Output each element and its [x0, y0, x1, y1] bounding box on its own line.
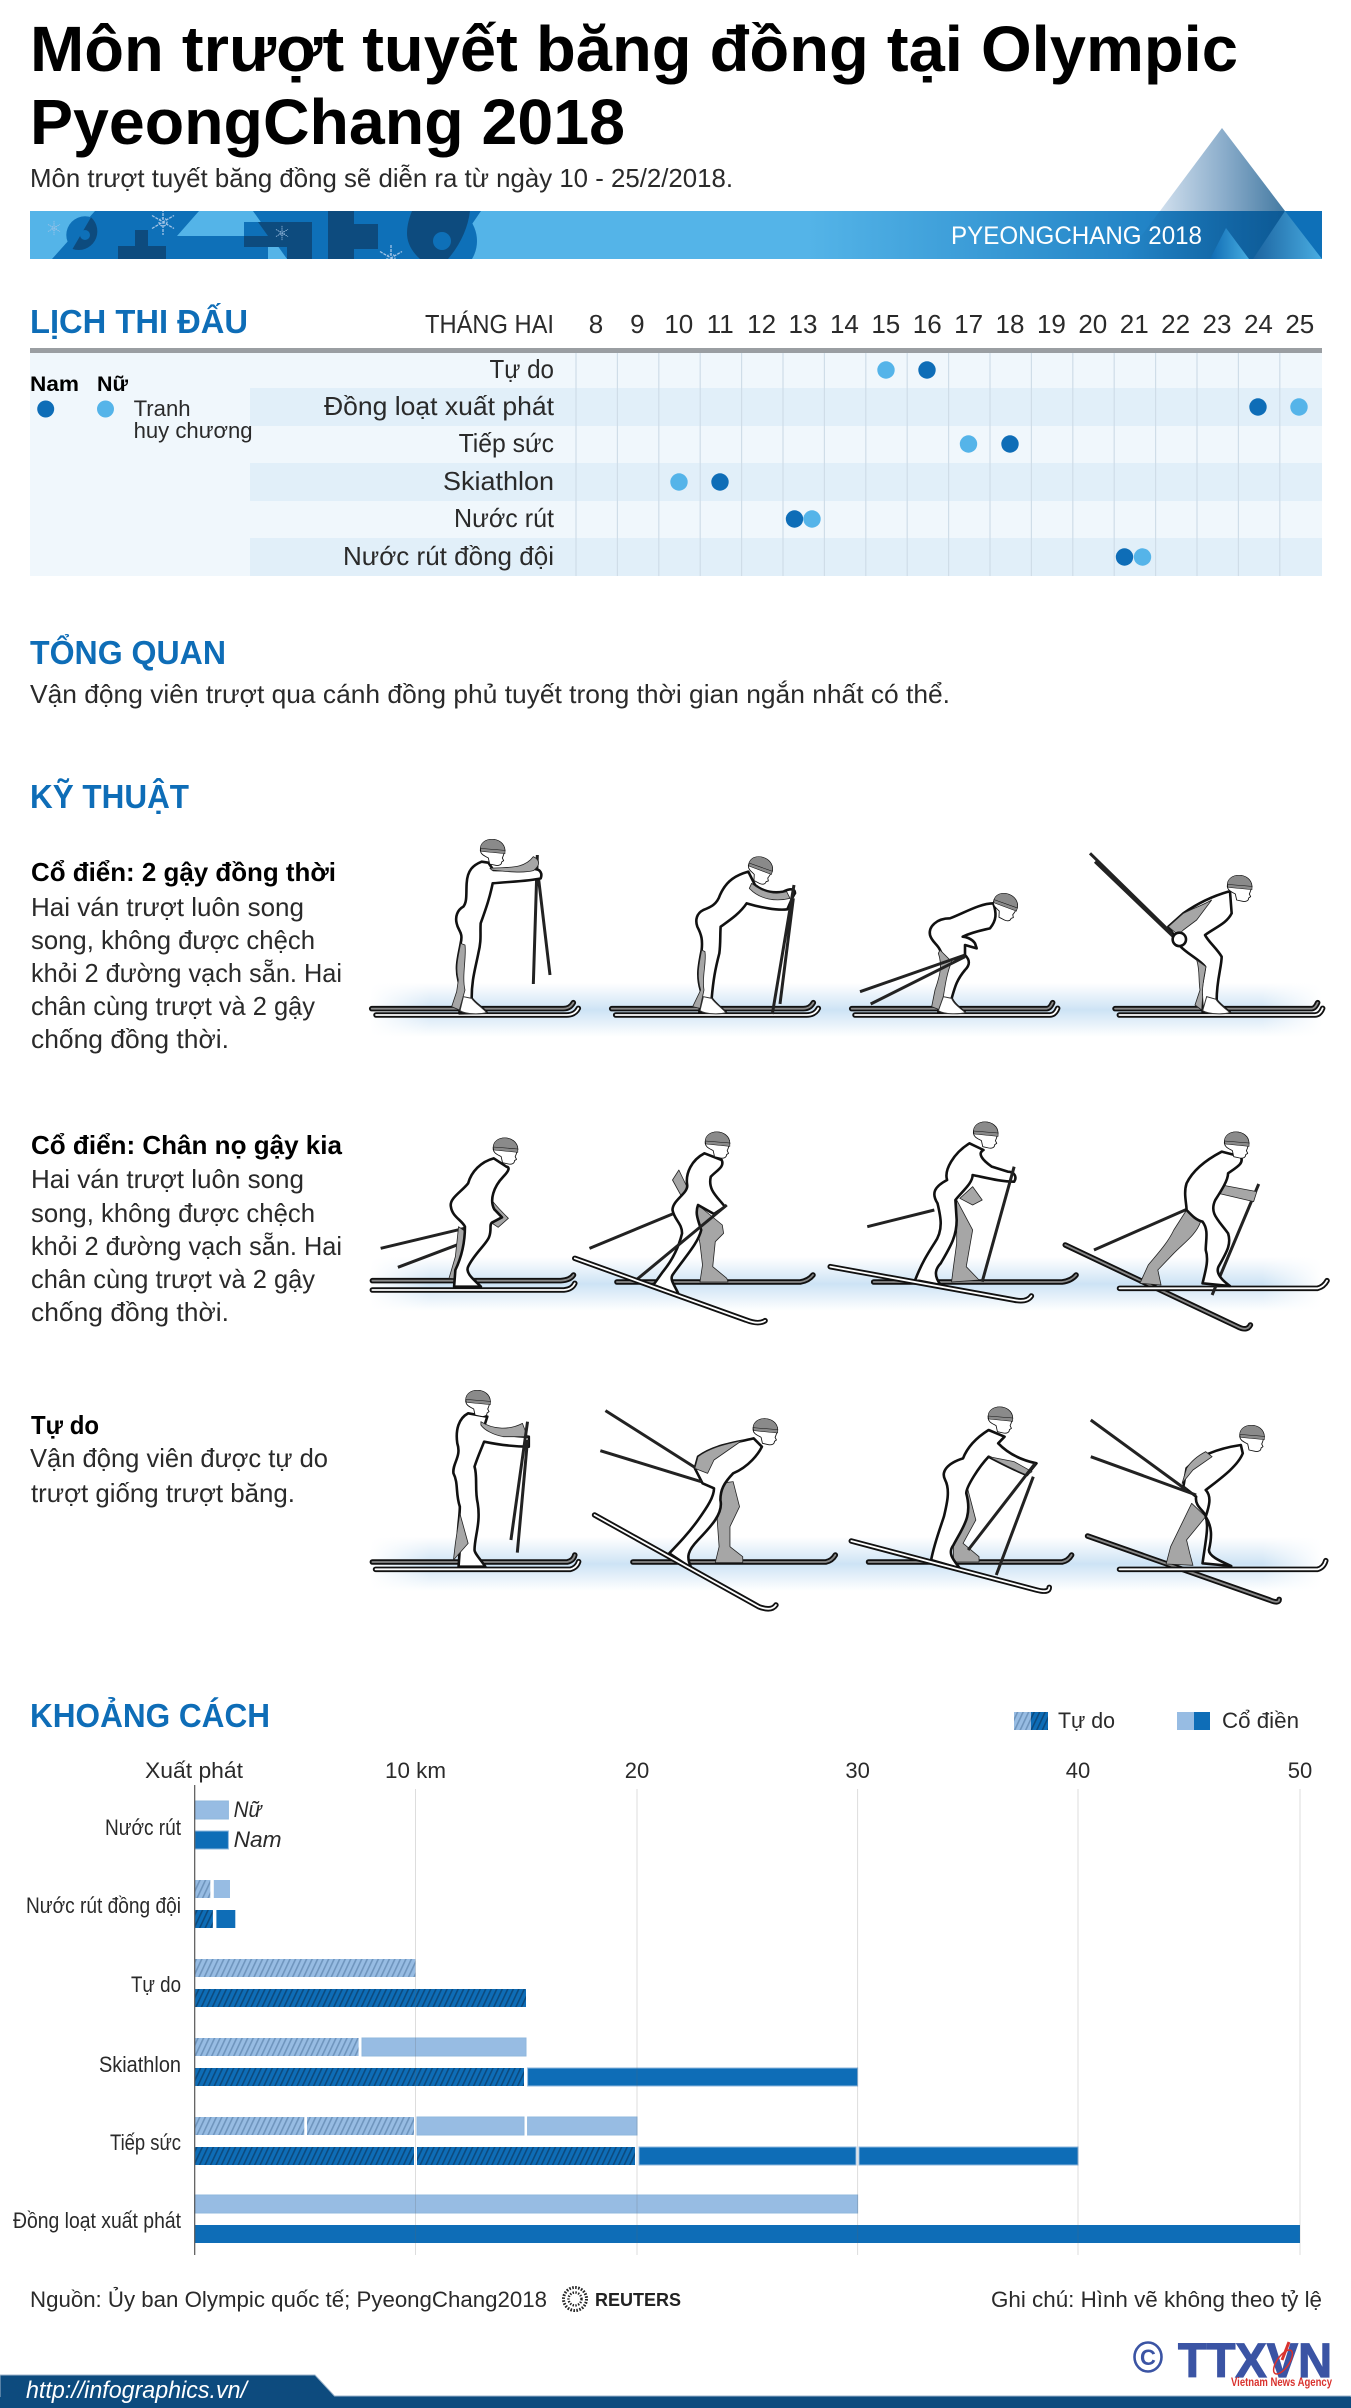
schedule date header: [425, 309, 1314, 339]
bars: Đồng loạt xuất phát: Đồng loạt xuất phát: [13, 2208, 181, 2233]
footer bar with URL: http://infographics.vn/: [26, 2377, 249, 2404]
bars: Tự do: [131, 1959, 526, 2007]
axis labels: 20: [625, 1758, 649, 1783]
subtitle: Môn trượt tuyết băng đồng sẽ diễn ra từ ngày 10 - 25/2/2018.: [30, 163, 733, 193]
heading: distances: KHOẢNG CÁCH: [30, 1697, 270, 1734]
schedule date header: 14: [830, 309, 859, 339]
note: Ghi chú: Hình vẽ không theo tỷ lệ: [991, 2287, 1322, 2312]
text: classic diagonal stride: song, không được chệch: [31, 1198, 315, 1228]
schedule legend: huy chương: [134, 418, 253, 443]
text: classic double poling: chống đồng thời.: [31, 1024, 229, 1054]
icon: Reuters logo: REUTERS: [595, 2290, 681, 2310]
bars: Skiathlon: [99, 2038, 858, 2086]
illustration: freestyle skier 4: [1088, 1420, 1326, 1602]
row: Nước rút đồng đội: Nước rút đồng đội: [343, 541, 554, 571]
text: classic double poling: song, không được chệch: [31, 925, 315, 955]
section: schedule: [30, 303, 1322, 576]
overview text: Vận động viên trượt qua cánh đồng phủ tuyết trong thời gian ngắn nhất có thể.: [30, 679, 950, 709]
logo: TTXVN: C: [1140, 2345, 1156, 2370]
schedule date header: 18: [996, 309, 1024, 339]
illustration: freestyle skier 1: [372, 1390, 579, 1569]
schedule date header: 19: [1037, 309, 1066, 339]
bars: Tiếp sức: [110, 2117, 1078, 2165]
schedule date header: 9: [630, 309, 645, 339]
bars: Nước rút: Nước rút: [105, 1815, 181, 1840]
row: Đồng loạt xuất phát: [324, 391, 1308, 421]
text: classic diagonal stride: Hai ván trượt luôn song: [31, 1164, 304, 1194]
schedule date header: 25: [1285, 309, 1314, 339]
legend: freestyle: [1014, 1708, 1115, 1733]
text: classic double poling: Cổ điển: 2 gậy đồng thời: [31, 857, 336, 887]
schedule date header: 21: [1120, 309, 1149, 339]
illustration: diagonal stride skier 4: [1065, 1132, 1327, 1329]
axis labels: 50: [1288, 1758, 1312, 1783]
title: Môn trượt tuyết băng đồng tại Olympic: [30, 13, 1238, 85]
bars: Đồng loạt xuất phát: [13, 2195, 1300, 2243]
legend: freestyle: Tự do: [1058, 1708, 1115, 1733]
text: classic diagonal stride: [31, 1130, 343, 1327]
schedule date header: 16: [913, 309, 942, 339]
schedule date header: 12: [747, 309, 776, 339]
illustration: freestyle skier 3: [851, 1407, 1072, 1591]
schedule date header: THÁNG HAI: [425, 309, 554, 339]
snow glow bands: [370, 983, 1322, 1591]
bars: Nước rút: Nam: [234, 1827, 282, 1852]
text: classic double poling: [31, 857, 342, 1054]
text: classic double poling: Hai ván trượt luôn song: [31, 892, 304, 922]
text: classic double poling: khỏi 2 đường vạch sẵn. Hai: [31, 958, 342, 988]
schedule date header: 20: [1078, 309, 1107, 339]
legend: classic: [1177, 1708, 1299, 1733]
axis labels: 30: [845, 1758, 870, 1783]
schedule date header: 8: [589, 309, 603, 339]
row: Tiếp sức: Tiếp sức: [459, 428, 554, 458]
illustration: diagonal stride skier 1: [372, 1138, 575, 1290]
schedule legend: Nữ: [97, 373, 129, 396]
icon: Reuters logo: [564, 2288, 681, 2310]
bars: Tự do: Tự do: [131, 1972, 181, 1997]
title: PyeongChang 2018: [30, 86, 625, 158]
logo: TTXVN: TTXVN: [1178, 2335, 1332, 2388]
text: freestyle: [30, 1410, 328, 1508]
schedule date header: 10: [664, 309, 693, 339]
row: Skiathlon: [443, 466, 729, 496]
bars: Skiathlon: Skiathlon: [99, 2052, 181, 2077]
illustration: double poling skier 3: [852, 891, 1058, 1015]
text: classic diagonal stride: khỏi 2 đường vạch sẵn. Hai: [31, 1231, 342, 1261]
banner label: PYEONGCHANG 2018: [951, 222, 1202, 250]
axis labels: Xuất phát: [145, 1758, 243, 1783]
schedule date header: 13: [789, 309, 817, 339]
text: classic diagonal stride: Cổ điển: Chân nọ gậy kia: [31, 1130, 343, 1160]
bars: Nước rút đồng đội: [26, 1880, 235, 1928]
bars: Nước rút: [105, 1797, 282, 1852]
header banner with mountain and Olympic pattern: [30, 128, 1322, 259]
schedule legend: Nam: [30, 373, 79, 396]
schedule legend: Tranh: [134, 396, 191, 421]
section: overview: [30, 634, 950, 709]
row: Đồng loạt xuất phát: Đồng loạt xuất phát: [324, 391, 555, 421]
section: distances chart: [13, 1697, 1312, 2255]
bars: Nước rút đồng đội: Nước rút đồng đội: [26, 1893, 181, 1918]
schedule date header: 17: [954, 309, 983, 339]
illustration: double poling skier 4: [1090, 853, 1323, 1015]
row: Tự do: Tự do: [490, 354, 554, 384]
schedule legend: [30, 373, 253, 443]
illustration: diagonal stride skier 3: [830, 1122, 1076, 1301]
row: Nước rút: Nước rút: [454, 503, 555, 533]
title: [30, 13, 1238, 158]
axis labels: 10 km: [385, 1758, 446, 1783]
row: Tự do: [490, 354, 936, 384]
heading: overview: TỔNG QUAN: [30, 634, 226, 671]
row: Skiathlon: Skiathlon: [443, 466, 554, 496]
heading: schedule: LỊCH THI ĐẤU: [30, 303, 248, 340]
text: freestyle: Vận động viên được tự do: [30, 1443, 328, 1473]
legend: classic: Cổ điền: [1222, 1708, 1299, 1733]
text: freestyle: trượt giống trượt băng.: [31, 1478, 295, 1508]
row: Tiếp sức: [459, 428, 1019, 458]
illustration: double poling skier 2: [612, 854, 818, 1015]
row: Nước rút đồng đội: [343, 541, 1151, 571]
axis labels: [145, 1758, 1312, 1783]
text: classic diagonal stride: chân cùng trượt và 2 gậy: [31, 1264, 315, 1294]
schedule date header: 22: [1161, 309, 1190, 339]
schedule date header: 23: [1203, 309, 1231, 339]
text: freestyle: Tự do: [31, 1410, 99, 1440]
text: classic double poling: chân cùng trượt và 2 gậy: [31, 991, 315, 1021]
source note: Nguồn: Ủy ban Olympic quốc tế; PyeongChang2018: [30, 2287, 547, 2312]
axis labels: 40: [1066, 1758, 1090, 1783]
schedule date header: 15: [871, 309, 900, 339]
illustration: freestyle skier 2: [595, 1411, 835, 1609]
text: classic diagonal stride: chống đồng thời.: [31, 1297, 229, 1327]
footer bar with URL: [0, 2375, 1351, 2408]
bars: Tiếp sức: Tiếp sức: [110, 2130, 181, 2155]
bars: Nước rút: Nữ: [234, 1797, 264, 1822]
row: Nước rút: [454, 503, 821, 533]
heading: technique: KỸ THUẬT: [30, 778, 189, 815]
schedule date header: 24: [1244, 309, 1273, 339]
illustration: double poling skier 1: [372, 839, 578, 1015]
illustration: diagonal stride skier 2: [575, 1132, 813, 1323]
schedule date header: 11: [707, 309, 734, 339]
